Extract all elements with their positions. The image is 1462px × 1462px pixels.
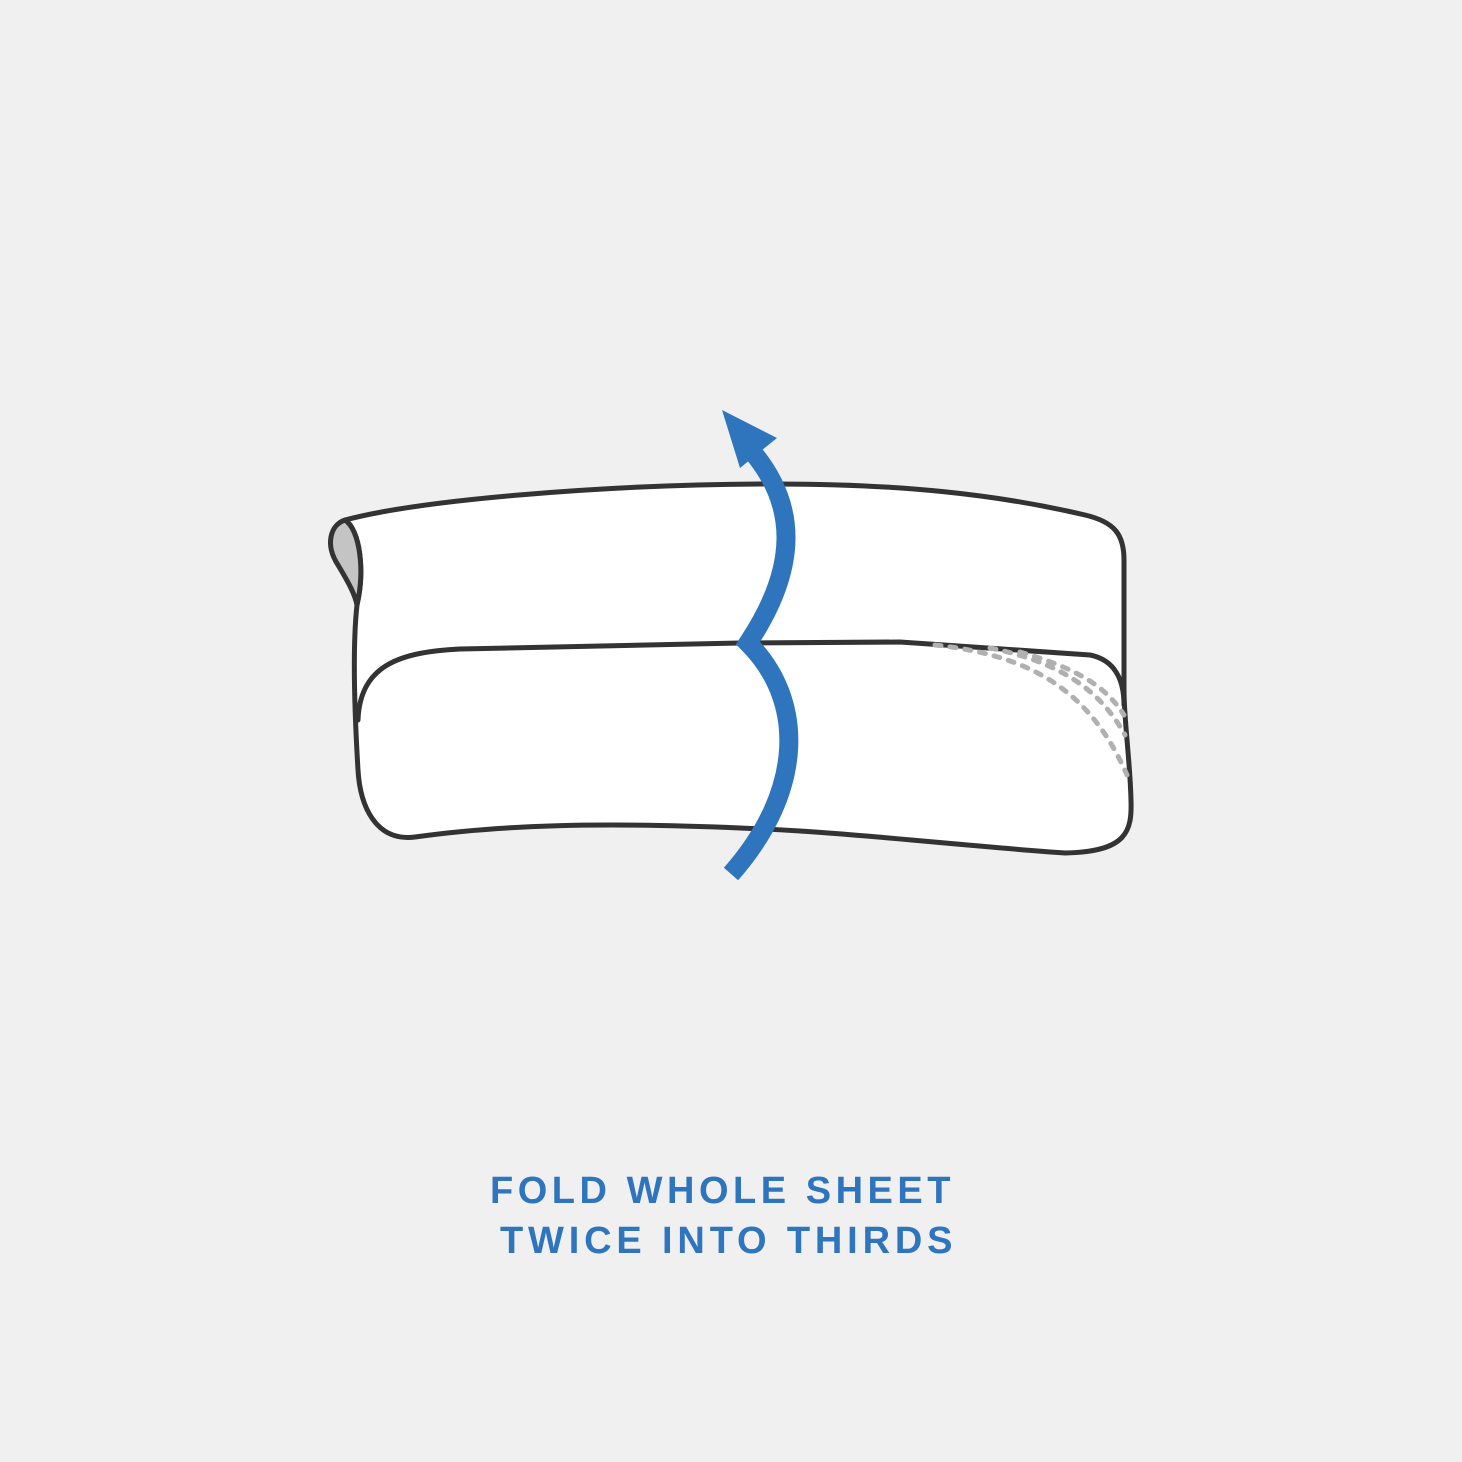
sheet outline — [345, 484, 1131, 853]
lower band top edge — [358, 642, 1124, 720]
left flap — [331, 520, 361, 605]
dotted fold guides — [935, 645, 1127, 775]
caption: FOLD WHOLE SHEET — [490, 1170, 955, 1212]
caption — [490, 1170, 957, 1262]
arrow — [722, 410, 789, 874]
caption: TWICE INTO THIRDS — [500, 1220, 957, 1262]
folded sheet — [331, 484, 1131, 853]
